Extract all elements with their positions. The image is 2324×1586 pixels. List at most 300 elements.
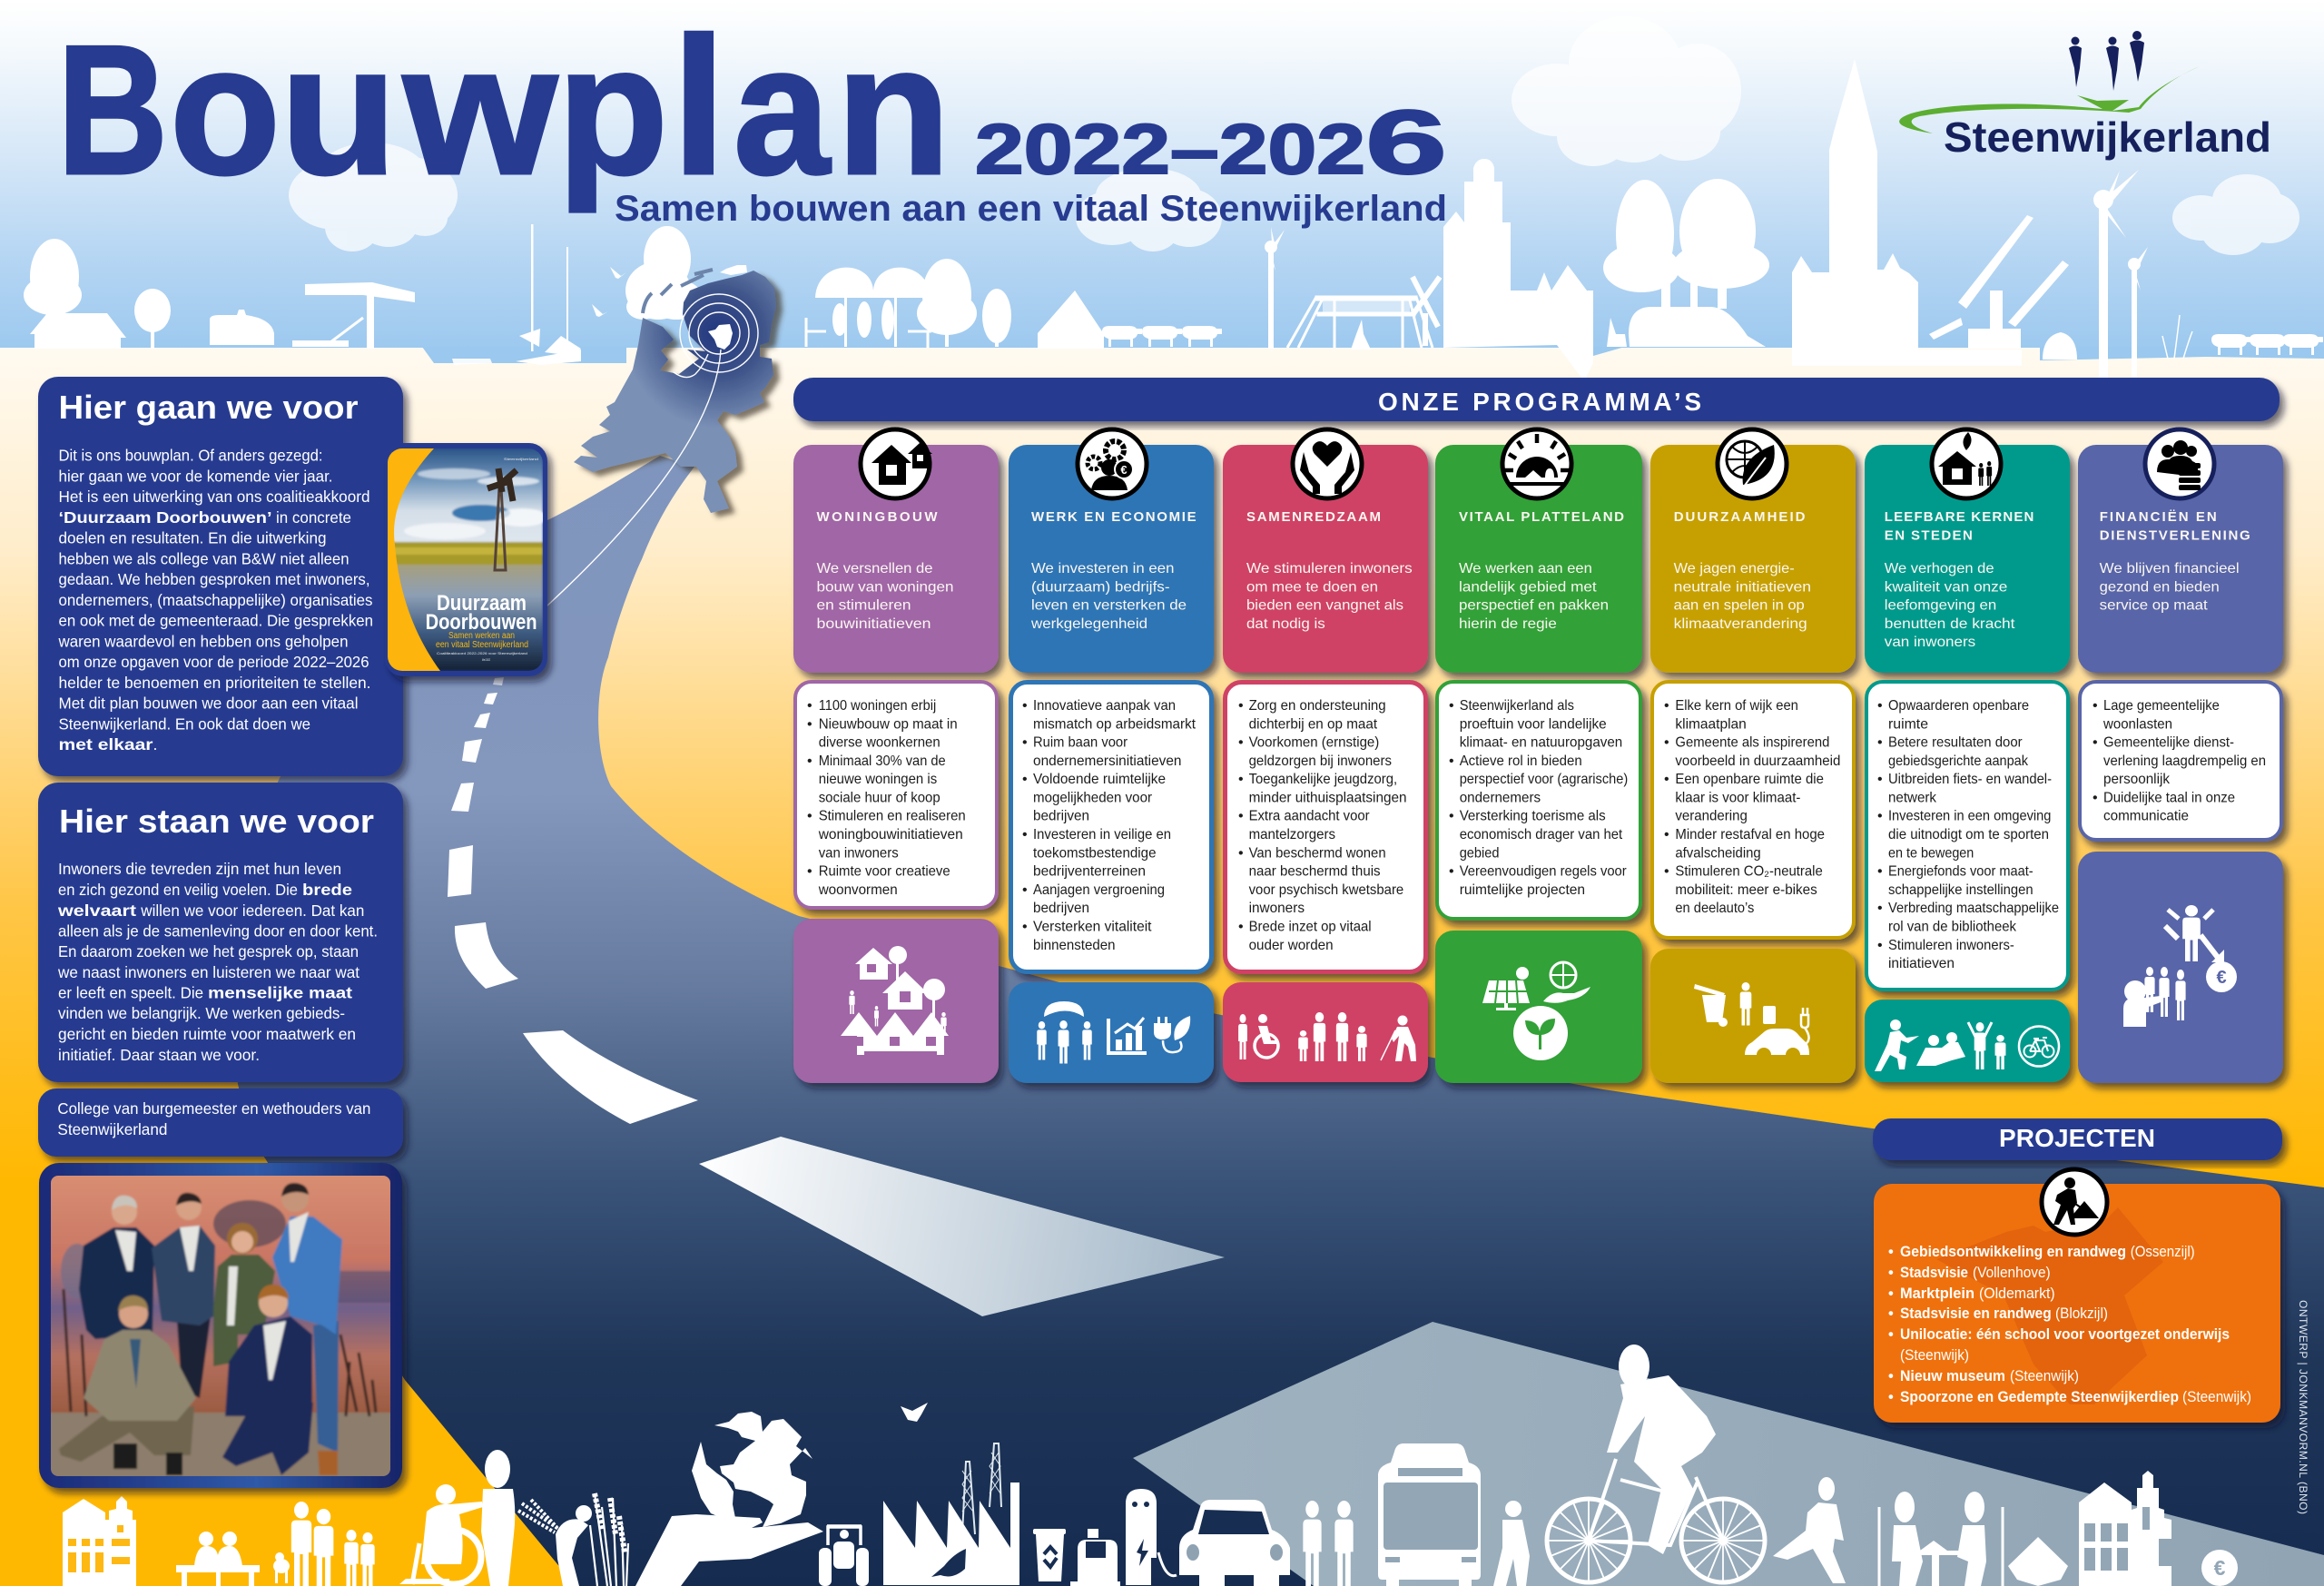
description: service op maat: [2100, 598, 2208, 614]
bullet list: bedrijven: [1033, 809, 1089, 824]
icon: houses: [861, 429, 932, 498]
panel: projecten: [1873, 1118, 2282, 1423]
bullet list: Zorg en ondersteuning: [1249, 698, 1386, 714]
trees, houses, bridge: [24, 239, 415, 349]
description: om mee te doen en: [1246, 579, 1378, 595]
bullet list: Betere resultaten door: [1888, 735, 2023, 751]
title: [57, 0, 1447, 229]
panel: hier staan we voor: [38, 783, 403, 1082]
bullet list: communicatie: [2103, 809, 2189, 824]
icon: hand holding globe: [635, 1412, 823, 1586]
illustration card: [1435, 931, 1642, 1083]
banner: onze programma's: [793, 378, 2280, 421]
bullet list: netwerk: [1888, 790, 1937, 805]
cover subtitle: Samen werken aan: [448, 631, 515, 641]
title word: u: [280, 7, 398, 213]
bullet list: [795, 682, 997, 908]
bullet list: •: [1022, 735, 1028, 751]
bullet list: Een openbare ruimte die: [1675, 772, 1824, 787]
bullet list: •: [807, 809, 812, 824]
ground background: [0, 348, 2324, 1586]
body text: Steenwijkerland. En ook dat doen we: [58, 714, 310, 733]
designer credit: ONTWERP | JONKMANVORM.NL (BNO): [2297, 1300, 2309, 1514]
bullet list: voor psychisch kwetsbare: [1249, 882, 1403, 898]
illustration card: [1223, 982, 1428, 1082]
bullet list: proeftuin voor landelijke: [1460, 716, 1607, 732]
bullet list: [1866, 682, 2068, 990]
cafe terrace: [806, 268, 931, 348]
project list: Spoorzone en Gedempte Steenwijkerdiep: [1900, 1389, 2179, 1405]
bullet list: •: [1022, 698, 1028, 714]
title word: n: [836, 7, 950, 213]
banner title: ONZE PROGRAMMA’S: [1378, 388, 1701, 416]
bullet list: initiatieven: [1888, 956, 1955, 971]
project list: •: [1888, 1389, 1894, 1405]
project list: •: [1888, 1265, 1894, 1281]
banner background: [793, 378, 2280, 421]
illustration card: [2078, 852, 2283, 1083]
bullet list: bedrijventerreinen: [1033, 864, 1146, 880]
programme: woningbouw: [793, 429, 999, 1083]
bullet list: Nieuwbouw op maat in: [819, 716, 958, 732]
bullet list: [1226, 683, 1425, 971]
heading: DIENSTVERLENING: [2100, 528, 2250, 544]
project list: (Ossenzijl): [2131, 1244, 2195, 1260]
icon: globe and leaf: [1718, 429, 1787, 498]
bullet list: •: [1877, 938, 1883, 953]
bullet list: •: [1664, 864, 1669, 880]
illustration card: [1009, 982, 1214, 1083]
bullet list: diverse woonkernen: [819, 735, 940, 751]
heading: FINANCIËN EN: [2100, 509, 2217, 525]
bullet list: Voldoende ruimtelijke: [1033, 772, 1166, 787]
icon: hands and heart: [1293, 429, 1362, 498]
programme: vitaal platteland: [1435, 429, 1642, 1083]
bullet list: Brede inzet op vitaal: [1249, 919, 1372, 935]
title word: w: [402, 7, 558, 213]
bullet list: •: [1877, 901, 1883, 916]
logo wordmark: Steenwijkerland: [1944, 113, 2271, 161]
header card: [1650, 445, 1856, 673]
icon: canal houses right: [2079, 1471, 2181, 1586]
cover photo: [388, 448, 547, 671]
icon: open book: [2008, 1537, 2068, 1586]
drawbridges: [1929, 215, 2069, 349]
description: gezond en bieden: [2100, 579, 2220, 595]
bullet list: Stimuleren inwoners-: [1888, 938, 2014, 953]
icon: hiker: [1493, 1501, 1530, 1586]
sailing boats: [452, 224, 581, 365]
bullet list: Versterken vitaliteit: [1033, 919, 1152, 935]
icon: people at a table: [1879, 1492, 2003, 1586]
body text: er leeft en speelt. Die: [58, 984, 203, 1002]
bullet list: en te bewegen: [1888, 845, 1974, 861]
icon: bus: [1378, 1443, 1481, 1586]
body text: initiatief. Daar staan we voor.: [58, 1046, 260, 1064]
bullet list: rol van de bibliotheek: [1888, 919, 2017, 935]
bullet list: •: [2093, 698, 2098, 714]
map watermark: [1936, 1207, 2163, 1404]
body text: waren waardevol en hebben ons geholpen: [58, 632, 349, 650]
heading: Hier staan we voor: [59, 803, 374, 840]
caption text: Steenwijkerland: [57, 1120, 167, 1138]
icon: electric car: [1179, 1500, 1290, 1586]
icon: euro coin: €: [2214, 1556, 2226, 1580]
body text: Het is een uitwerking van ons coalitieakkoord: [58, 488, 370, 506]
description: [1030, 561, 1187, 632]
tree behind the map and birds: [592, 226, 747, 320]
bullet list: •: [1022, 882, 1028, 898]
bullet list: Actieve rol in bieden: [1460, 754, 1582, 769]
body text: .: [153, 735, 157, 754]
icon: gears and euro: [1078, 429, 1147, 498]
bullet list: voorbeeld in duurzaamheid: [1675, 754, 1840, 769]
bullet list: van inwoners: [819, 845, 899, 861]
large turbines and reeds: [2043, 170, 2323, 379]
project list: (Blokzijl): [2055, 1305, 2108, 1322]
description: [2100, 561, 2240, 614]
bullet list: 1100 woningen erbij: [819, 698, 936, 714]
description: We stimuleren inwoners: [1246, 561, 1413, 576]
city towers, big tree, church: [1443, 59, 2022, 381]
bullet list: •: [807, 716, 812, 732]
bullet list: Minder restafval en hoge: [1675, 827, 1825, 842]
description: perspectief en pakken: [1459, 598, 1609, 614]
map of the Netherlands: [547, 270, 776, 606]
project list: (Steenwijk): [2010, 1368, 2079, 1384]
bullet list: klimaatplan: [1675, 716, 1747, 732]
bullet list: •: [1238, 845, 1244, 861]
cover small print: Coalitieakkoord 2022-2026 voor Steenwijkerland: [437, 651, 527, 655]
bullet list: Uitbreiden fiets- en wandel-: [1888, 772, 2052, 787]
bullet list: verandering: [1675, 809, 1748, 824]
panel: hier gaan we voor: [38, 377, 403, 776]
programme: financien en dienstverlening: [2078, 429, 2283, 1083]
bullet list: Innovatieve aanpak van: [1033, 698, 1176, 714]
subtitle: Samen bouwen aan een vitaal Steenwijkerland: [615, 189, 1447, 229]
project list: (Oldemarkt): [1979, 1286, 2055, 1302]
bullet list: Minimaal 30% van de: [819, 754, 946, 769]
icon: fuel pump and charger: [1070, 1489, 1177, 1586]
title word: a: [734, 7, 832, 213]
project list: Stadsvisie: [1900, 1265, 1968, 1281]
bullet list: Stimuleren CO₂-neutrale: [1675, 864, 1823, 880]
description: landelijk gebied met: [1459, 579, 1597, 595]
header card: [1009, 445, 1214, 673]
icon: people and coins: [2145, 429, 2214, 498]
bullet list: Gemeentelijke dienst-: [2103, 735, 2234, 751]
bullet list: •: [1664, 827, 1669, 842]
description: We jagen energie-: [1674, 561, 1795, 576]
icon: gears and euro: €: [1120, 463, 1128, 477]
bullet list: Investeren in veilige en: [1033, 827, 1171, 842]
logo swoosh: [1899, 66, 2200, 133]
project list: •: [1888, 1368, 1894, 1384]
bullet list: •: [1449, 754, 1454, 769]
icon: bird: [901, 1403, 928, 1422]
bullet list: nieuwe woningen is: [819, 772, 937, 787]
body text: gedaan. We hebben gesproken met inwoners,: [58, 570, 370, 588]
bullet list: •: [1022, 772, 1028, 787]
description: kwaliteit van onze: [1885, 579, 2007, 595]
bullet list: •: [1238, 809, 1244, 824]
target rings: [547, 294, 758, 606]
body text: gericht en bieden ruimte voor maatwerk en: [58, 1025, 356, 1043]
bullet list: gebied: [1460, 845, 1500, 861]
logo Steenwijkerland: [1899, 31, 2271, 161]
body text: we naast inwoners en luisteren we naar wat: [57, 963, 359, 981]
bullet list: persoonlijk: [2103, 772, 2171, 787]
light road surface at the bottom: [1133, 1322, 2324, 1586]
title word: o: [170, 7, 281, 213]
cover title: Duurzaam: [437, 591, 527, 616]
bullet list: ondernemersinitiatieven: [1033, 754, 1182, 769]
cover title: Doorbouwen: [426, 610, 537, 635]
heading: [2100, 509, 2250, 544]
bullet list: Voorkomen (ernstige): [1249, 735, 1379, 751]
icon: house, leaf and people: [1932, 429, 2001, 498]
bullet list: •: [1238, 698, 1244, 714]
cover subtitle: een vitaal Steenwijkerland: [436, 640, 528, 650]
cover title: [426, 591, 537, 635]
banner projecten: PROJECTEN: [1999, 1124, 2155, 1152]
Steenwijkerland highlight: [708, 324, 733, 350]
bullet list: woonvormen: [818, 882, 898, 898]
body text: in concrete: [276, 508, 351, 527]
header card: [793, 445, 999, 673]
bullet list: [1011, 683, 1211, 971]
bullet list: •: [807, 698, 812, 714]
cows: [1102, 326, 1222, 347]
project list: •: [1888, 1305, 1894, 1322]
icon: sun over the countryside: [1502, 429, 1571, 498]
bullet list: mantelzorgers: [1249, 827, 1335, 842]
icon: family with dog: [273, 1502, 375, 1586]
body text: helder te benoemen en prioriteiten te stellen.: [58, 674, 370, 692]
panel background: [38, 783, 403, 1082]
bullet list: klimaat- en natuuropgaven: [1460, 735, 1622, 751]
bullet list: •: [1238, 919, 1244, 935]
body text: met elkaar: [58, 735, 153, 754]
bullet list: afvalscheiding: [1675, 845, 1761, 861]
heading: VITAAL PLATTELAND: [1459, 509, 1624, 525]
bullet list: binnensteden: [1033, 938, 1115, 953]
description: [1885, 561, 2015, 650]
body text: [58, 447, 373, 754]
body text: willen we voor iedereen. Dat kan: [140, 901, 364, 920]
panel: college caption: [38, 1089, 403, 1157]
bullet list: Aanjagen vergroening: [1033, 882, 1165, 898]
bullet list: perspectief voor (agrarische): [1460, 772, 1628, 787]
body text: ondernemers, (maatschappelijke) organisaties: [58, 591, 373, 609]
description: (duurzaam) bedrijfs-: [1031, 579, 1169, 595]
background sky: [0, 0, 2324, 368]
bullet list: ondernemers: [1460, 790, 1541, 805]
description: neutrale initiatieven: [1674, 579, 1811, 595]
bullet list: naar beschermd thuis: [1249, 864, 1381, 880]
caption background: [38, 1089, 403, 1157]
project list: Gebiedsontwikkeling en randweg: [1900, 1244, 2126, 1260]
body text: en ook met de gemeenteraad. Die gesprekken: [58, 612, 373, 630]
illustration card: [1865, 1000, 2070, 1082]
bullet list: Duidelijke taal in onze: [2103, 790, 2235, 805]
body text: alleen als je de samenleving door en door kent.: [58, 921, 378, 940]
illustration card: [793, 919, 999, 1083]
heading: LEEFBARE KERNEN: [1885, 509, 2034, 525]
years: 6: [1365, 92, 1447, 193]
bullet list: Ruimte voor creatieve: [819, 864, 950, 880]
bullet list: Energiefonds voor maat-: [1888, 864, 2034, 880]
project list: (Vollenhove): [1973, 1265, 2051, 1281]
body text: menselijke maat: [208, 984, 352, 1002]
body text: hier gaan we voor de komende vier jaar.: [58, 467, 332, 485]
bullet list: Versterking toerisme als: [1460, 809, 1606, 824]
bullet list: [2080, 682, 2281, 840]
bullet list: geldzorgen bij inwoners: [1249, 754, 1392, 769]
bullet list: •: [1449, 809, 1454, 824]
bullet list: schappelijke instellingen: [1888, 882, 2034, 898]
illustration card: [1650, 949, 1856, 1083]
bullet list: inwoners: [1249, 901, 1305, 916]
description: [1246, 561, 1413, 632]
project list: Stadsvisie en randweg: [1900, 1305, 2052, 1322]
heading: WONINGBOUW: [817, 509, 938, 525]
title word: B: [57, 7, 168, 213]
description: bieden een vangnet als: [1246, 598, 1403, 614]
caption text: College van burgemeester en wethouders van: [57, 1099, 370, 1118]
clouds: [289, 16, 2299, 255]
icon: wheelchair and carer: [399, 1450, 515, 1586]
bullet list: •: [807, 754, 812, 769]
skyline silhouettes: [24, 59, 2323, 381]
bullet list: Steenwijkerland als: [1460, 698, 1574, 714]
bullet list: Elke kern of wijk een: [1675, 698, 1798, 714]
description: We verhogen de: [1885, 561, 1994, 576]
cover subtitle: [436, 631, 528, 650]
description: werkgelegenheid: [1030, 616, 1147, 632]
logo figures: [2069, 31, 2144, 91]
cover small print: Mei 2022: [482, 657, 490, 662]
icon: tractor: [819, 1526, 869, 1586]
bullet list: [1652, 682, 1854, 938]
header card: [1435, 445, 1642, 673]
body text: [57, 860, 378, 1064]
bullet list: Stimuleren en realiseren: [819, 809, 966, 824]
bullet list: klaar is voor klimaat-: [1675, 790, 1800, 805]
bullet list: •: [1449, 698, 1454, 714]
bullet list: die uitnodigt om te sporten: [1888, 827, 2049, 842]
banner projecten: [1873, 1118, 2282, 1160]
bullet list: verlening laagdrempelig en: [2103, 754, 2266, 769]
programme: duurzaamheid: [1650, 429, 1856, 1083]
bullet list: •: [2093, 790, 2098, 805]
bullet list: •: [1238, 772, 1244, 787]
bullet list: woonlasten: [2102, 716, 2172, 732]
bullet list: Toegankelijke jeugdzorg,: [1249, 772, 1397, 787]
project list: •: [1888, 1244, 1894, 1260]
bullet list: Verbreding maatschappelijke: [1888, 901, 2059, 916]
bullet list: sociale huur of koop: [819, 790, 940, 805]
years: 2022–202: [975, 109, 1365, 189]
bullet list: mismatch op arbeidsmarkt: [1033, 716, 1196, 732]
bullet list: ruimtelijke projecten: [1460, 882, 1585, 898]
header card: [1223, 445, 1428, 673]
bullet list: ouder worden: [1249, 938, 1334, 953]
bullet list: •: [1238, 735, 1244, 751]
bullet list: en deelauto’s: [1675, 901, 1754, 916]
description: leven en versterken de: [1031, 598, 1187, 614]
body text: brede: [302, 881, 352, 899]
description: We werken aan een: [1459, 561, 1592, 576]
description: dat nodig is: [1246, 616, 1325, 632]
description: [1459, 561, 1609, 632]
illustration card: €: [2216, 968, 2227, 988]
icon: cyclist: [1547, 1345, 1765, 1582]
bullet list: •: [1877, 772, 1883, 787]
body text: om onze opgaven voor de periode 2022–2026: [58, 653, 369, 671]
bullet list: economisch drager van het: [1460, 827, 1623, 842]
description: van inwoners: [1885, 635, 1975, 650]
bullet list: Lage gemeentelijke: [2103, 698, 2220, 714]
caption text: [57, 1099, 370, 1138]
body text: doelen en resultaten. En die uitwerking: [58, 529, 327, 547]
description: [817, 561, 953, 632]
bullet list: Opwaarderen openbare: [1888, 698, 2029, 714]
icon: people on a bench: [176, 1532, 260, 1586]
projects card: [1874, 1184, 2280, 1423]
water and sky notches in the ground: [422, 347, 2324, 363]
bullet list: bedrijven: [1033, 901, 1089, 916]
project list: •: [1888, 1326, 1894, 1343]
icon: recycling bin: [1033, 1529, 1066, 1581]
icon: two walkers: [1303, 1501, 1354, 1586]
bullet list: dichterbij en op maat: [1249, 716, 1378, 732]
bullet list: •: [1877, 809, 1883, 824]
bullet list: •: [1877, 698, 1883, 714]
body text: ‘Duurzaam Doorbouwen’: [58, 508, 272, 527]
body text: vinden we belangrijk. We werken gebieds-: [58, 1004, 345, 1022]
bullet list: Van beschermd wonen: [1249, 845, 1386, 861]
description: bouwinitiatieven: [817, 616, 931, 632]
body text: en zich gezond en veilig voelen. Die: [58, 881, 298, 899]
project list: [1888, 1244, 2251, 1405]
body text: Dit is ons bouwplan. Of anders gezegd:: [58, 447, 323, 465]
description: en stimuleren: [817, 598, 911, 614]
description: benutten de kracht: [1885, 616, 2015, 632]
project list: (Steenwijk): [1900, 1347, 1969, 1364]
bullet list: Extra aandacht voor: [1249, 809, 1370, 824]
bullet list: •: [1664, 772, 1669, 787]
heading: [1885, 509, 2034, 544]
years: [975, 92, 1447, 193]
description: We blijven financieel: [2100, 561, 2240, 576]
group photo of the college: [39, 1163, 402, 1488]
header card: [1865, 445, 2070, 673]
trees and small church: [917, 259, 1104, 349]
description: aan en spelen in op: [1674, 598, 1805, 614]
project list: (Steenwijk): [2182, 1389, 2251, 1405]
heading: EN STEDEN: [1885, 528, 1973, 544]
icon: road worker: [2042, 1169, 2107, 1235]
description: [1674, 561, 1811, 632]
panel background: [38, 377, 403, 776]
bullet list: •: [1664, 698, 1669, 714]
project list: Unilocatie: één school voor voortgezet onderwijs: [1900, 1326, 2230, 1343]
bullet list: [1437, 682, 1640, 919]
body text: hebben we als college van B&W niet alleen: [58, 549, 349, 567]
bullet list: Gemeente als inspirerend: [1675, 735, 1829, 751]
bullet list: ruimte: [1888, 716, 1928, 732]
